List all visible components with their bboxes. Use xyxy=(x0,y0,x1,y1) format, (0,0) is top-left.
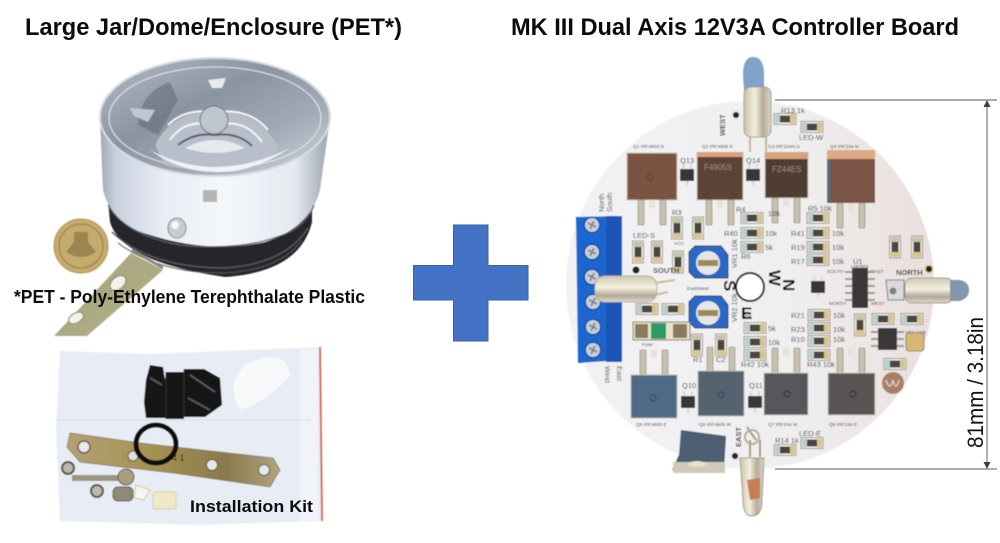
labels: silkscreen text: VR3 100k xyxy=(905,330,927,336)
icon: top MOSFET row: Q2 IRF4905 S xyxy=(702,144,733,150)
icon: small transistors: Q14 xyxy=(746,156,760,165)
labels: silkscreen text: R6 xyxy=(741,252,751,261)
icon: metal bracket xyxy=(67,433,280,487)
icon: bottom MOSFET row xyxy=(631,347,875,428)
icon: compass centre hole: S xyxy=(720,280,739,291)
icon: left south LED sensor xyxy=(595,276,675,302)
labels: silkscreen text: South xyxy=(605,192,614,212)
labels: silkscreen text: WEST xyxy=(871,301,885,307)
labels: silkscreen text: EAST xyxy=(871,269,884,275)
icon: compass centre hole: W xyxy=(765,270,784,287)
icon: blue screw terminal block xyxy=(576,216,622,363)
icon: compass centre hole: N xyxy=(779,279,798,291)
icon: bottom MOSFET row: Q7 IRFZ44 W xyxy=(768,422,798,428)
icon: small transistors: Q11 xyxy=(749,381,763,390)
icon: blue plus sign xyxy=(414,225,528,341)
labels: silkscreen text: R1 xyxy=(693,355,703,364)
labels: silkscreen text: R5 10k xyxy=(808,204,832,213)
icon: right north LED sensor xyxy=(886,278,969,303)
labels: silkscreen text: R3 xyxy=(672,208,682,217)
photo: controller board xyxy=(566,57,969,516)
labels: silkscreen text: NORTH xyxy=(829,301,847,307)
labels: silkscreen text: Fuse xyxy=(642,342,653,348)
dimension: board height arrows and lines xyxy=(775,100,997,469)
labels: silkscreen text: R23 xyxy=(791,325,805,334)
icon: top MOSFET row: F4905S xyxy=(704,163,732,172)
icon: trim potentiometers: VR1 10k xyxy=(730,239,739,268)
icon: mounting bracket bottom xyxy=(672,430,726,473)
icon: trim potentiometers xyxy=(687,239,739,328)
labels: silkscreen text: C2 xyxy=(716,355,726,364)
icon: compass centre hole xyxy=(720,270,798,323)
title: board heading: MK III Dual Axis 12V3A Controller Board xyxy=(511,14,959,41)
labels: silkscreen text: R8 xyxy=(742,312,752,321)
labels: silkscreen text: LM2902 xyxy=(851,264,869,270)
labels: silkscreen text: East xyxy=(615,366,624,382)
icon: screws and nuts xyxy=(62,462,176,509)
icon: metal mounting strap xyxy=(54,253,163,336)
dimension label: 81mm / 3.18in xyxy=(963,317,988,448)
icon: top west LED sensor xyxy=(743,57,771,152)
labels: silkscreen text: 10k xyxy=(832,257,844,266)
labels: silkscreen text: LED-E xyxy=(799,429,821,438)
labels: silkscreen text: 10k xyxy=(832,243,844,252)
labels: silkscreen text: NORTH xyxy=(896,268,923,277)
labels: silkscreen text: SOUTH xyxy=(653,266,679,275)
icon: plastic bag xyxy=(55,347,322,525)
labels: silkscreen text: R14 1k xyxy=(775,436,799,445)
labels: silkscreen text: 5k xyxy=(768,324,776,333)
icon: bottom MOSFET row: Q5 IRF4905 E xyxy=(636,422,667,428)
title: jar heading: Large Jar/Dome/Enclosure (PET*) xyxy=(25,14,402,41)
labels: silkscreen text xyxy=(597,106,927,447)
labels: silkscreen text: R13 1k xyxy=(781,106,805,115)
photo: installation kit bag xyxy=(55,347,322,525)
labels: silkscreen text: WEST xyxy=(718,114,727,136)
labels: silkscreen text: R43 10k xyxy=(807,360,835,369)
icon: top MOSFET row xyxy=(627,144,875,228)
labels: silkscreen text: 10k xyxy=(833,325,845,334)
labels: silkscreen text: 10k xyxy=(833,335,845,344)
labels: silkscreen text: North xyxy=(597,194,606,212)
photo: PET jar with coin and strap xyxy=(54,58,330,336)
icon: VR3 trimmer xyxy=(906,333,924,351)
icon: metal bracket: 4 1 xyxy=(172,453,185,463)
labels: silkscreen text: 5k xyxy=(765,243,773,252)
labels: silkscreen text: LED-S xyxy=(633,231,655,240)
labels: silkscreen text: 10k xyxy=(832,229,844,238)
icon: top MOSFET row: FZ44ES xyxy=(772,165,801,174)
labels: silkscreen text: R10 xyxy=(791,335,805,344)
labels: silkscreen text: VCC xyxy=(674,241,685,247)
labels: silkscreen text: R42 10k xyxy=(741,360,769,369)
icon: ground pads xyxy=(632,112,932,460)
labels: silkscreen text: LED-W xyxy=(799,133,824,142)
icon: top MOSFET row: G3 IRFZ44N S xyxy=(768,144,800,150)
icon: small transistors: Q10 xyxy=(682,381,696,390)
icon: cable gland xyxy=(144,365,222,419)
icon: small transistors: Q13 xyxy=(680,156,694,165)
labels: silkscreen text: U1 xyxy=(853,257,863,266)
icon: jar threaded black base xyxy=(108,200,312,277)
icon: top MOSFET row: Q1 IRF4903 N xyxy=(633,144,664,150)
labels: silkscreen text: R17 xyxy=(791,257,805,266)
icon: resistor arrays xyxy=(632,114,923,456)
icon: trim potentiometers: VR2 10k xyxy=(730,293,739,322)
icon: bottom east LED sensor xyxy=(740,427,764,516)
labels: silkscreen text: 10k xyxy=(768,338,780,347)
icon: light dependent resistor xyxy=(882,372,904,394)
icon: small transistors xyxy=(680,156,825,413)
icon: bottom MOSFET row: Q8 IRFZ44 E xyxy=(829,422,857,428)
caption: installation kit: Installation Kit xyxy=(190,497,313,516)
labels: silkscreen text: EAST xyxy=(734,427,743,447)
icon: O-ring xyxy=(136,425,176,463)
board disc xyxy=(566,101,934,469)
icon: fuse xyxy=(633,322,690,340)
labels: silkscreen text: R21 xyxy=(791,311,805,320)
icon: quarter coin xyxy=(54,219,108,273)
icon: secondary chip xyxy=(871,328,904,350)
icon: transparent jar body xyxy=(100,118,330,247)
icon: trim potentiometers: East/West xyxy=(687,286,709,292)
labels: silkscreen text: 10k xyxy=(768,209,780,218)
labels: silkscreen text: West xyxy=(603,366,612,384)
labels: silkscreen text: R4 xyxy=(736,205,746,214)
icon: top MOSFET row: Q4 IRFZ44 N xyxy=(830,144,859,150)
labels: silkscreen text: 10k xyxy=(765,229,777,238)
labels: silkscreen text: R41 xyxy=(791,229,805,238)
icon: bottom MOSFET row: Q6 IRF4905 W xyxy=(699,422,731,428)
icon: jar lid xyxy=(100,58,330,176)
labels: silkscreen text: 10k xyxy=(833,311,845,320)
labels: silkscreen text: R19 xyxy=(791,243,805,252)
icon: U1 op-amp chip xyxy=(845,268,875,308)
caption: PET definition: *PET - Poly-Ethylene Terephthalate Plastic xyxy=(14,286,365,307)
labels: silkscreen text: SOUTH xyxy=(827,269,844,275)
icon: compass centre hole: E xyxy=(741,304,752,323)
labels: silkscreen text: R40 xyxy=(724,229,738,238)
